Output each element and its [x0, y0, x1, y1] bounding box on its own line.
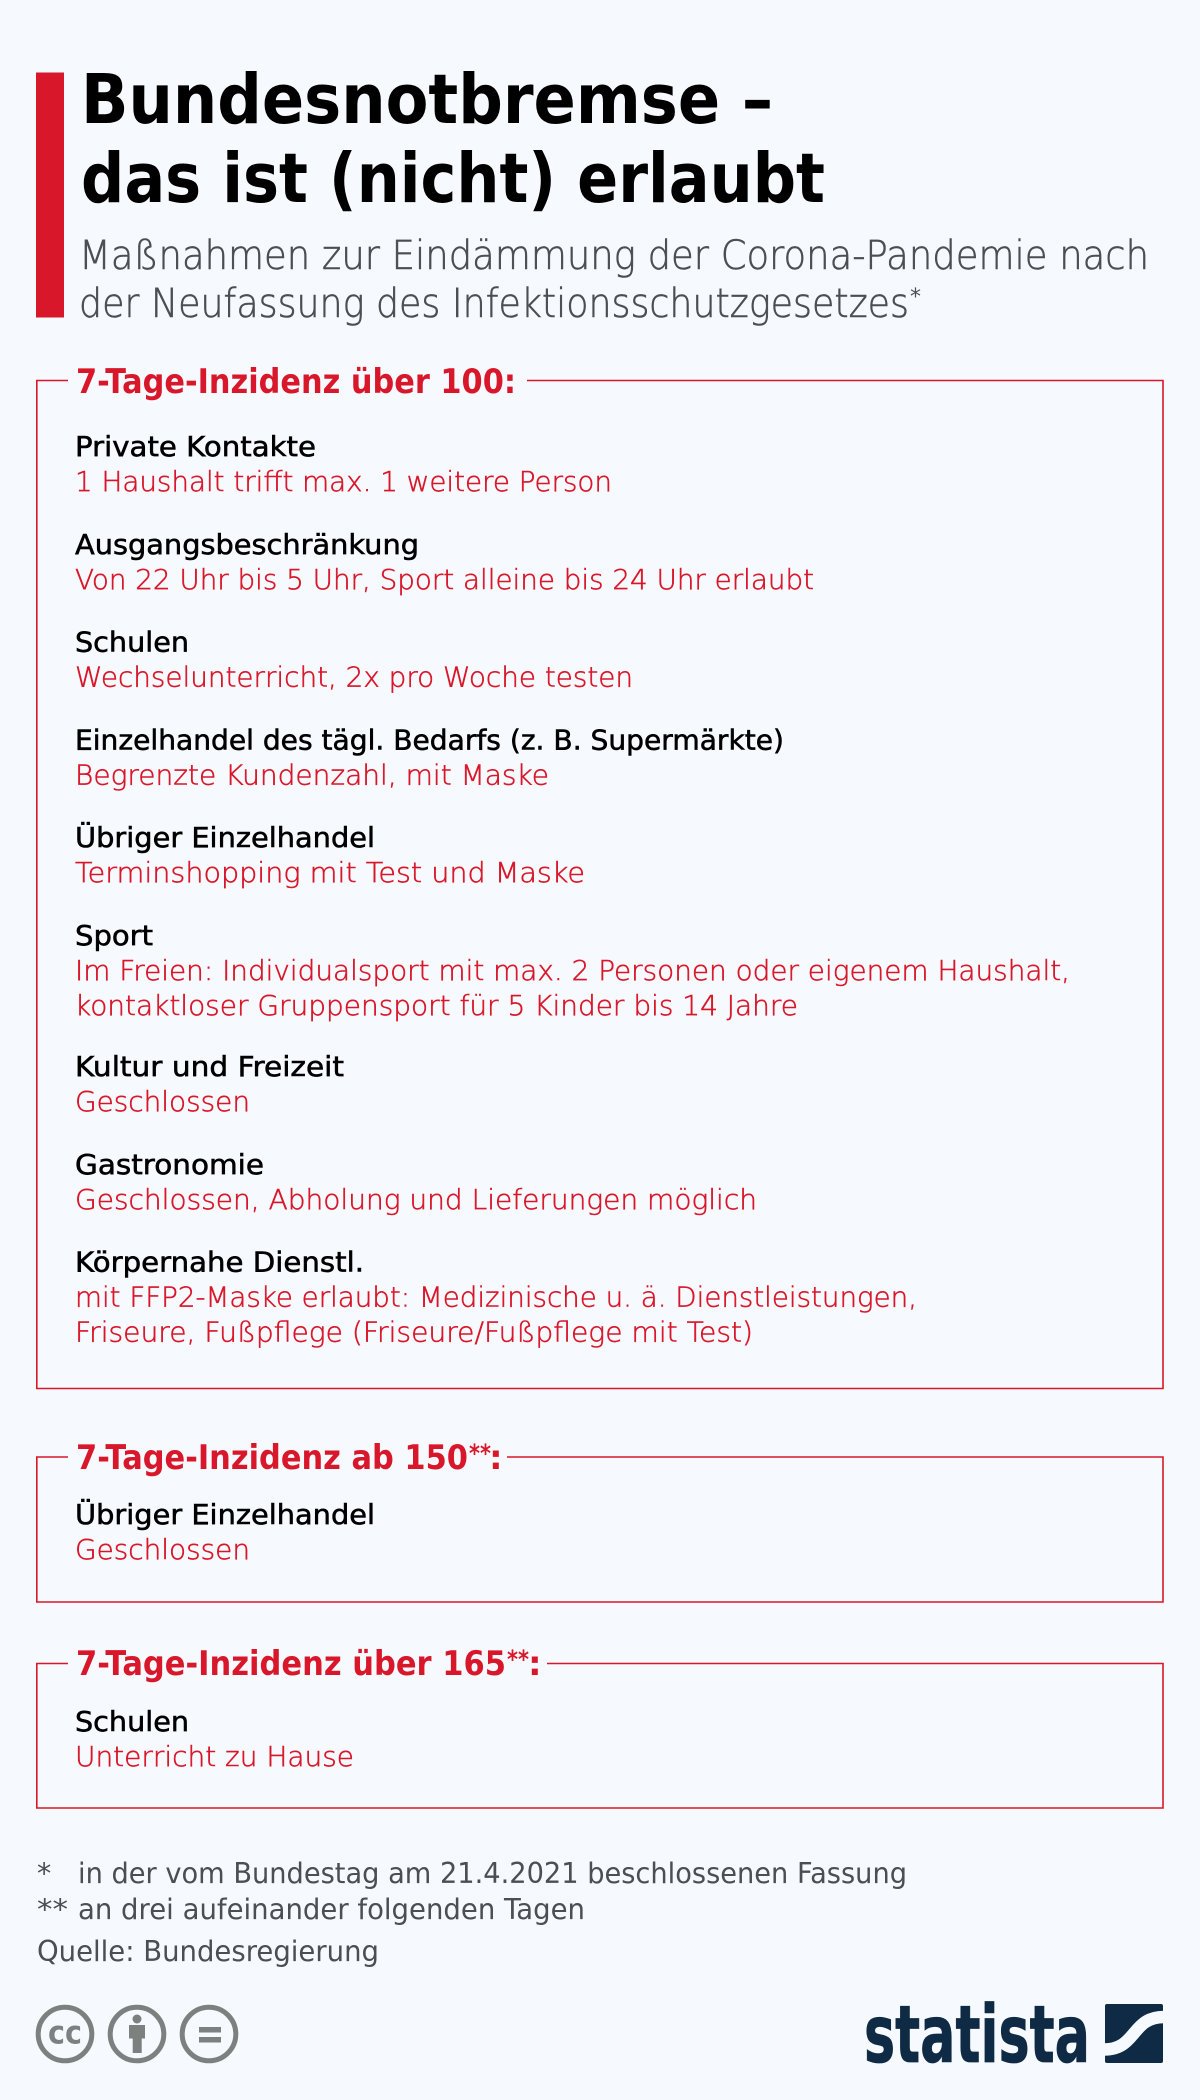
- item: Übriger Einzelhandel: Übriger Einzelhandel: [75, 820, 375, 854]
- item: Einzelhandel des täglichen Bedarfs: Einzelhandel des tägl. Bedarfs (z. B. Supermärkte): [75, 724, 784, 756]
- item: Sport: Sport: [75, 920, 153, 952]
- item: Körpernahe Dienstleistungen: Friseure, Fußpflege (Friseure/Fußpflege mit Test): [75, 1316, 753, 1348]
- panel heading: ab 150: **: [469, 1439, 491, 1468]
- item: Gastronomie: [75, 1149, 757, 1216]
- item: Schulen: [75, 626, 633, 694]
- footnotes: *: [37, 1857, 51, 1890]
- item: Schulen zu Hause: [75, 1706, 354, 1773]
- panel: 7-Tage-Inzidenz ab 150: [37, 1438, 1163, 1602]
- footnotes: in der vom Bundestag am 21.4.2021 beschlossenen Fassung: [78, 1857, 907, 1890]
- panel heading: über 165: 7-Tage-Inzidenz über 165: [76, 1644, 506, 1684]
- item: Private Kontakte: Private Kontakte: [75, 431, 316, 463]
- item: Einzelhandel des täglichen Bedarfs: [75, 724, 784, 792]
- item: Sport: kontaktloser Gruppensport für 5 Kinder bis 14 Jahre: [75, 990, 798, 1022]
- icon: Creative Commons CC: cc: [48, 2014, 82, 2052]
- item: Körpernahe Dienstleistungen: Körpernahe Dienstl.: [75, 1246, 364, 1278]
- panel heading: über 165: **: [507, 1645, 529, 1674]
- item: Private Kontakte: [75, 431, 612, 498]
- item: Schulen zu Hause: Schulen: [75, 1706, 189, 1738]
- title: das ist (nicht) erlaubt: [81, 139, 825, 219]
- title: [81, 60, 825, 219]
- panel: 7-Tage-Inzidenz über 100: [37, 362, 1163, 1388]
- statista logo: [864, 1989, 1164, 2081]
- item: Sport: Im Freien: Individualsport mit max. 2 Personen oder eigenem Haushalt,: [75, 955, 1070, 987]
- icon: attribution person: [110, 2007, 164, 2061]
- item: Übriger Einzelhandel geschlossen: Übriger Einzelhandel: [75, 1497, 375, 1531]
- item: Ausgangsbeschränkung: Ausgangsbeschränkung: [75, 529, 419, 561]
- item: Schulen: Schulen: [75, 626, 189, 658]
- icon: Creative Commons CC: [38, 2007, 92, 2061]
- panel heading: ab 150: :: [489, 1438, 503, 1478]
- subtitle: [79, 233, 1149, 327]
- item: Gastronomie: Gastronomie: [75, 1149, 264, 1181]
- item: Sport: [75, 920, 1070, 1022]
- panel heading: über 165: :: [528, 1644, 542, 1684]
- item: Ausgangsbeschränkung: Von 22 Uhr bis 5 Uhr, Sport alleine bis 24 Uhr erlaubt: [75, 564, 814, 596]
- item: Ausgangsbeschränkung: [75, 529, 814, 596]
- item: Einzelhandel des täglichen Bedarfs: Begrenzte Kundenzahl, mit Maske: [75, 760, 549, 792]
- subtitle: *: [910, 285, 921, 310]
- item: Gastronomie: Geschlossen, Abholung und Lieferungen möglich: [75, 1184, 757, 1216]
- item: Kultur und Freizeit: [75, 1051, 344, 1118]
- item: Körpernahe Dienstleistungen: [75, 1246, 917, 1348]
- item: Übriger Einzelhandel: [75, 820, 585, 889]
- subtitle: der Neufassung des Infektionsschutzgesetzes: [79, 281, 909, 327]
- item: Schulen: Wechselunterricht, 2x pro Woche testen: [75, 662, 633, 694]
- logo wordmark: statista: [864, 1989, 1090, 2081]
- panel heading: ab 150: 7-Tage-Inzidenz ab 150: [76, 1438, 468, 1478]
- panel: 7-Tage-Inzidenz über 165: [37, 1644, 1163, 1808]
- footnotes: [37, 1857, 907, 1926]
- item: Schulen zu Hause: Unterricht zu Hause: [75, 1741, 354, 1773]
- panel heading: über 100: 7-Tage-Inzidenz über 100:: [76, 362, 516, 402]
- logo mark: [1104, 2004, 1164, 2063]
- header accent bar: [36, 72, 64, 318]
- footnotes: **: [37, 1893, 68, 1926]
- footnotes: an drei aufeinander folgenden Tagen: [78, 1893, 585, 1926]
- item: Kultur und Freizeit: Geschlossen: [75, 1086, 250, 1118]
- source: Quelle: Bundesregierung: [37, 1935, 379, 1968]
- item: Private Kontakte: 1 Haushalt trifft max. 1 weitere Person: [75, 466, 612, 498]
- title: Bundesnotbremse –: [81, 60, 773, 140]
- item: Übriger Einzelhandel geschlossen: Geschlossen: [75, 1534, 250, 1566]
- item: Übriger Einzelhandel geschlossen: [75, 1497, 375, 1566]
- item: Körpernahe Dienstleistungen: mit FFP2-Maske erlaubt: Medizinische u. ä. Dienstleistungen,: [75, 1282, 917, 1314]
- icon: no derivatives equals: [182, 2007, 236, 2061]
- item: Kultur und Freizeit: Kultur und Freizeit: [75, 1051, 344, 1083]
- item: Übriger Einzelhandel: Terminshopping mit Test und Maske: [75, 857, 585, 889]
